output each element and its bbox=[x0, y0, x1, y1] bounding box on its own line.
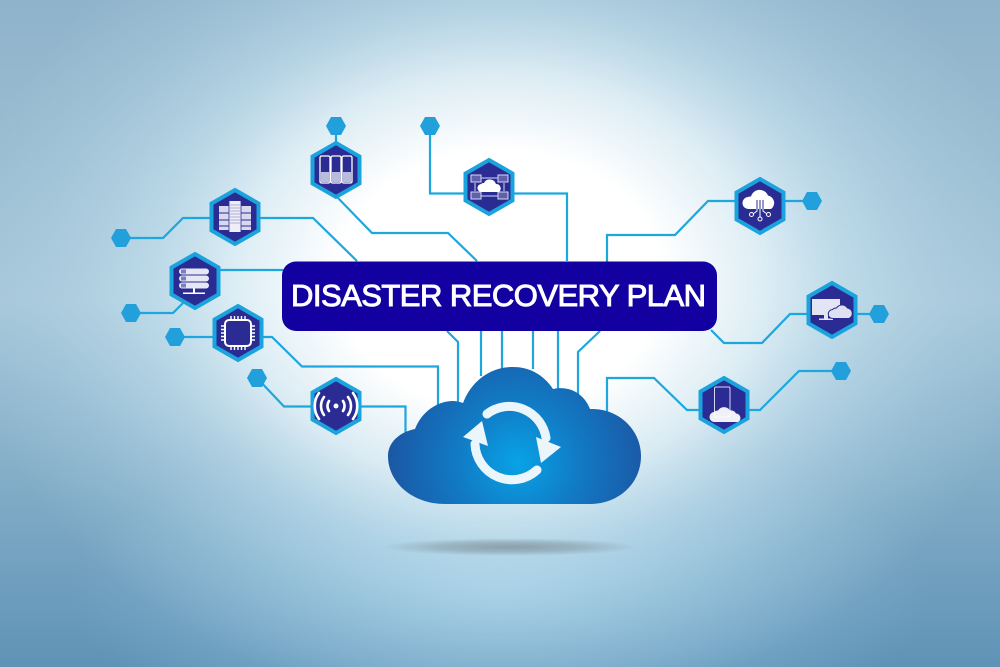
cloud bbox=[388, 367, 641, 504]
connector lines bbox=[121, 126, 879, 433]
icon: microchip bbox=[214, 306, 262, 360]
title: DISASTER RECOVERY PLAN bbox=[291, 278, 706, 313]
icon: cloud network of computers bbox=[466, 160, 512, 214]
icon: server rack on network bbox=[172, 254, 218, 308]
icon: cloud with circuit bbox=[736, 179, 784, 233]
icon: phone with cloud bbox=[700, 378, 748, 432]
title banner bbox=[282, 262, 717, 331]
icon: data center bbox=[212, 190, 258, 244]
cloud ground shadow bbox=[382, 538, 638, 556]
icon: server towers bbox=[312, 143, 360, 197]
icon: monitor with cloud bbox=[808, 283, 856, 337]
icon: sync arrows bbox=[463, 406, 561, 480]
icon: wireless signal bbox=[312, 379, 360, 433]
terminal nodes bbox=[111, 117, 889, 387]
